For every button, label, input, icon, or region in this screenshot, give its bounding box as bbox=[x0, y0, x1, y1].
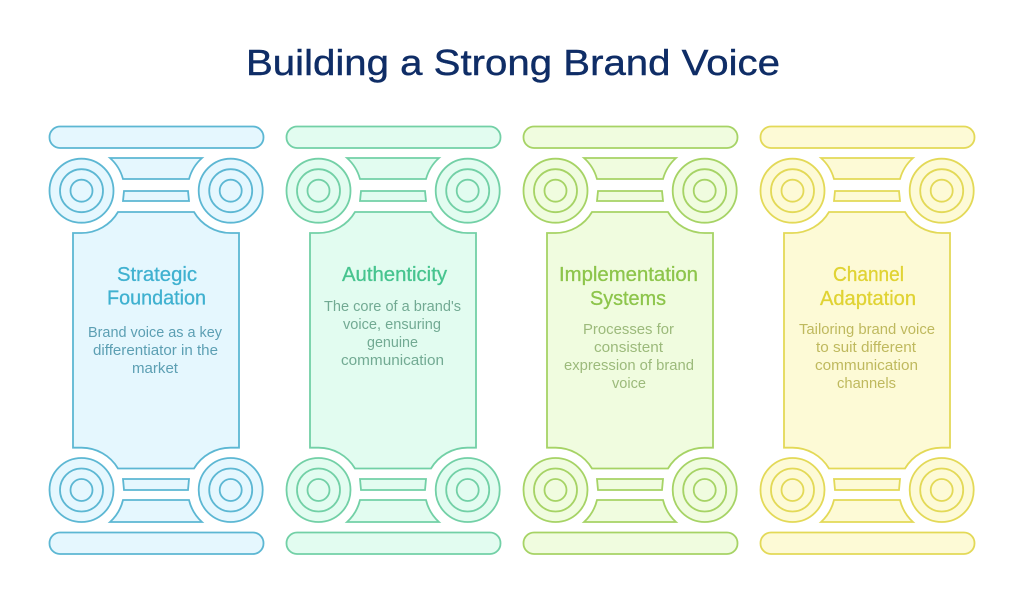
panel: Strategic Foundation pillar bbox=[50, 126, 264, 554]
text: Implementation Systems description: voice bbox=[612, 375, 646, 392]
text: Implementation Systems description bbox=[564, 321, 694, 392]
heading: Implementation Systems: Implementation bbox=[559, 264, 698, 286]
text: Authenticity description: genuine bbox=[367, 334, 418, 351]
text: Implementation Systems description: Processes for bbox=[583, 321, 674, 338]
title: Building a Strong Brand Voice bbox=[246, 42, 780, 83]
text: Authenticity description bbox=[324, 298, 461, 369]
heading: Implementation Systems bbox=[559, 264, 698, 310]
text: Channel Adaptation description: Tailoring brand voice bbox=[799, 321, 935, 338]
text: Authenticity description: voice, ensuring bbox=[343, 316, 441, 333]
pillar shape: yellow bbox=[760, 126, 974, 554]
text: Channel Adaptation description: communication bbox=[815, 357, 918, 374]
text: Strategic Foundation description bbox=[88, 324, 222, 377]
heading: Strategic Foundation: Strategic bbox=[117, 264, 197, 286]
heading: Strategic Foundation: Foundation bbox=[107, 288, 206, 310]
heading: Strategic Foundation bbox=[107, 264, 206, 310]
pillar shape: lime bbox=[524, 126, 738, 554]
panel: Channel Adaptation pillar bbox=[760, 126, 974, 554]
heading: Authenticity: Authenticity bbox=[342, 264, 447, 286]
pillar shape: green bbox=[286, 126, 500, 554]
heading: Channel Adaptation bbox=[820, 264, 916, 310]
text: Channel Adaptation description bbox=[799, 321, 935, 392]
panel: Authenticity pillar bbox=[286, 126, 500, 554]
text: Authenticity description: communication bbox=[341, 352, 444, 369]
text: Strategic Foundation description: differentiator in the bbox=[93, 342, 218, 359]
text: Channel Adaptation description: to suit different bbox=[816, 339, 917, 356]
heading: Channel Adaptation: Channel bbox=[833, 264, 904, 286]
text: Strategic Foundation description: market bbox=[132, 360, 179, 377]
text: Authenticity description: The core of a brand's bbox=[324, 298, 461, 315]
text: Implementation Systems description: expression of brand bbox=[564, 357, 694, 374]
panel: Implementation Systems pillar bbox=[524, 126, 738, 554]
text: Strategic Foundation description: Brand voice as a key bbox=[88, 324, 222, 341]
text: Implementation Systems description: consistent bbox=[594, 339, 664, 356]
text: Channel Adaptation description: channels bbox=[837, 375, 896, 392]
heading: Channel Adaptation: Adaptation bbox=[820, 288, 916, 310]
pillar shape: blue bbox=[50, 126, 264, 554]
heading: Implementation Systems: Systems bbox=[590, 288, 666, 310]
